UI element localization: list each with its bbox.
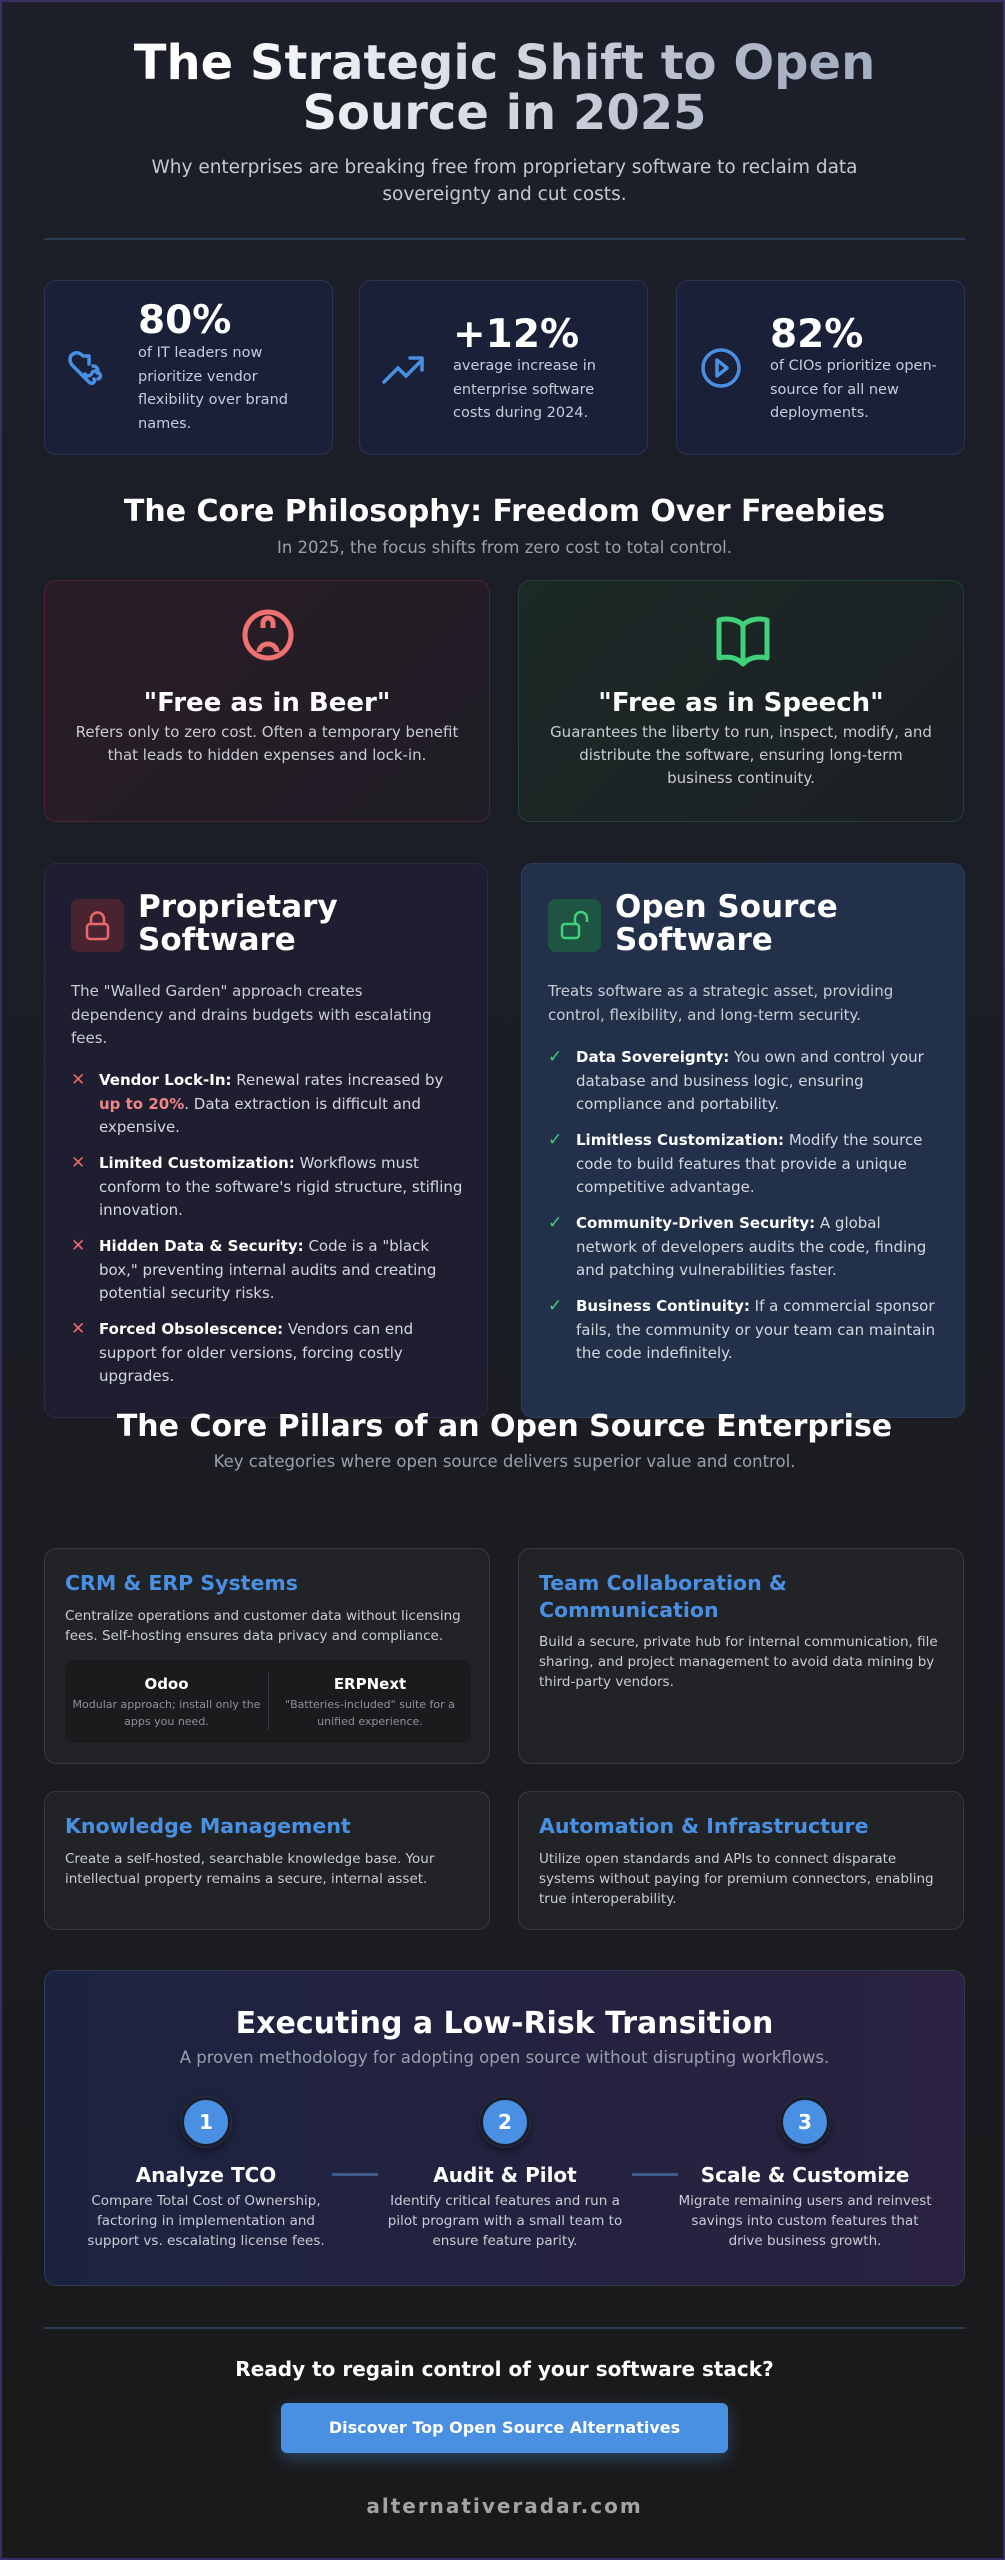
number badge (480, 2097, 530, 2147)
bullet: continuity: ✓ (548, 1296, 562, 1316)
number badge: 3 (798, 2110, 812, 2134)
intro: Treats software as a strategic asset, providing control, flexibility, and long-term security. (548, 982, 893, 1024)
subtitle: Why enterprises are breaking free from proprietary software to reclaim data sovereignty and cut costs. (151, 157, 858, 205)
erpnext (285, 1675, 455, 1728)
panel: open source software (521, 863, 965, 1418)
card title: "Free as in Beer" (144, 688, 390, 718)
bullet: security: ✓ (548, 1213, 562, 1233)
panel: transition: Analyze TCO (136, 2163, 276, 2187)
erpnext: "Batteries-included" suite for a unified experience. (285, 1698, 455, 1728)
subheading: In 2025, the focus shifts from zero cost to total control. (277, 538, 732, 557)
panel title: Open Source (615, 889, 838, 925)
panel title: Proprietary (138, 889, 338, 925)
footer: alternativeradar.com (366, 2494, 643, 2518)
odoo (73, 1675, 260, 1728)
bullet: security: Community-Driven Security: A global network of developers audits the code, finding and patching vulnerabilities faster. (576, 1214, 926, 1279)
panel: proprietary software (44, 863, 488, 1418)
stat number: 80% (138, 298, 231, 343)
CTA button: Discover Top Open Source Alternatives (329, 2418, 680, 2437)
icon: lock (71, 899, 124, 952)
panel: transition: Migrate remaining users and reinvest savings into custom features that drive business growth. (678, 2193, 932, 2249)
stat card 2 (359, 280, 648, 455)
icon: sad face (242, 610, 294, 660)
card title: Knowledge Management (65, 1814, 351, 1838)
panel: automation (518, 1791, 964, 1930)
odoo: Odoo (144, 1675, 189, 1693)
card title: "Free as in Speech" (598, 688, 884, 718)
step 3 (678, 2096, 932, 2249)
CTA button (281, 2403, 728, 2453)
panel: transition: Identify critical features and run a pilot program with a small team to ensure feature parity. (388, 2193, 622, 2249)
number badge: 2 (498, 2110, 512, 2134)
stat text: of CIOs prioritize open-source for all new deployments. (770, 358, 937, 421)
arrow connector (332, 2173, 378, 2176)
panel title: Software (615, 922, 773, 958)
title: The Strategic Shift to Open (134, 35, 875, 91)
comparison box: odoo vs erpnext (65, 1660, 471, 1743)
panel title: Software (138, 922, 296, 958)
bullet: forced obsolescence: Forced Obsolescence: Vendors can end support for older versions, forcing costly upgrades. (99, 1320, 413, 1385)
stat text: of IT leaders now prioritize vendor flexibility over brand names. (138, 345, 288, 432)
panel: CRM & ERP (44, 1548, 490, 1764)
bullet: limited customization: ✕ (71, 1153, 85, 1173)
icon: unlock (548, 899, 601, 952)
card title: Team Collaboration & Communication (539, 1571, 787, 1622)
card text: Build a secure, private hub for internal communication, file sharing, and project management to avoid data mining by third-party vendors. (539, 1634, 938, 1690)
erpnext: ERPNext (334, 1675, 406, 1693)
panel: transition: Audit & Pilot (433, 2163, 577, 2187)
step 2 (388, 2096, 622, 2249)
panel: transition: Scale & Customize (701, 2163, 909, 2187)
bullet: hidden data: ✕ (71, 1236, 85, 1256)
CTA text: Ready to regain control of your software stack? (235, 2357, 774, 2381)
title (2, 38, 1005, 138)
bullet: data sovereignty: Data Sovereignty: You own and control your database and business logic, ensuring compliance and portability. (576, 1048, 924, 1113)
heading: core philosophy: The Core Philosophy: Freedom Over Freebies (124, 494, 885, 529)
card title: Automation & Infrastructure (539, 1814, 869, 1838)
bullet: vendor lock-in: ✕ (71, 1070, 85, 1090)
number badge (780, 2097, 830, 2147)
stat text: average increase in enterprise software costs during 2024. (453, 358, 596, 421)
step 1 (87, 2096, 325, 2249)
heading: pillars: The Core Pillars of an Open Source Enterprise (117, 1409, 892, 1444)
panel: knowledge management (44, 1791, 490, 1930)
panel title (138, 889, 338, 958)
icon: open book (716, 616, 770, 666)
odoo: Modular approach; install only the apps you need. (73, 1698, 260, 1728)
icon: handshake (68, 351, 102, 385)
stat card 3 (676, 280, 965, 455)
card text: Guarantees the liberty to run, inspect, modify, and distribute the software, ensuring long-term business continuity. (550, 723, 932, 787)
icon: play circle (701, 348, 741, 388)
bullet: limited customization: Limited Customization: Workflows must conform to the software's rigid structure, stifling innovation. (99, 1154, 462, 1219)
card text: Utilize open standards and APIs to connect disparate systems without paying for premium connectors, enabling true interoperability. (539, 1851, 934, 1907)
bullet: vendor lock-in: Vendor Lock-In: Renewal rates increased by up to 20%. Data extraction is difficult and expensive. (99, 1071, 443, 1136)
panel: team collaboration (518, 1548, 964, 1764)
stat number: 82% (770, 312, 863, 357)
bullet: data sovereignty: ✓ (548, 1047, 562, 1067)
arrow connector (632, 2173, 678, 2176)
title: Source in 2025 (302, 85, 707, 141)
stat card 1 (44, 280, 333, 455)
panel: free as in speech (518, 580, 964, 822)
stat number: +12% (453, 312, 579, 357)
panel: transition: Compare Total Cost of Ownership, factoring in implementation and support vs. escalating license fees. (87, 2193, 325, 2249)
bullet: customization: Limitless Customization: Modify the source code to build features that provide a unique competitive advantage. (576, 1131, 922, 1196)
card title: CRM & ERP Systems (65, 1571, 298, 1595)
panel subtitle: A proven methodology for adopting open source without disrupting workflows. (180, 2048, 829, 2067)
panel title: Executing a Low-Risk Transition (236, 2006, 773, 2041)
panel title (615, 889, 838, 958)
bullet: forced obsolescence: ✕ (71, 1319, 85, 1339)
bullet: hidden data: Hidden Data & Security: Code is a "black box," preventing internal audits and creating potential security risks. (99, 1237, 436, 1302)
card text: Refers only to zero cost. Often a temporary benefit that leads to hidden expenses and lock-in. (76, 723, 458, 764)
card text: Centralize operations and customer data without licensing fees. Self-hosting ensures data privacy and compliance. (65, 1608, 461, 1644)
bullet: continuity: Business Continuity: If a commercial sponsor fails, the community or your team can maintain the code indefinitely. (576, 1297, 935, 1362)
panel: transition (44, 1970, 965, 2286)
bullet: customization: ✓ (548, 1130, 562, 1150)
icon: trend up (382, 356, 424, 384)
intro: The "Walled Garden" approach creates dependency and drains budgets with escalating fees. (71, 982, 432, 1047)
number badge (181, 2097, 231, 2147)
panel: free as in beer (44, 580, 490, 822)
number badge: 1 (199, 2110, 213, 2134)
subheading: Key categories where open source delivers superior value and control. (214, 1452, 795, 1471)
card text: Create a self-hosted, searchable knowledge base. Your intellectual property remains a secure, internal asset. (65, 1851, 434, 1887)
